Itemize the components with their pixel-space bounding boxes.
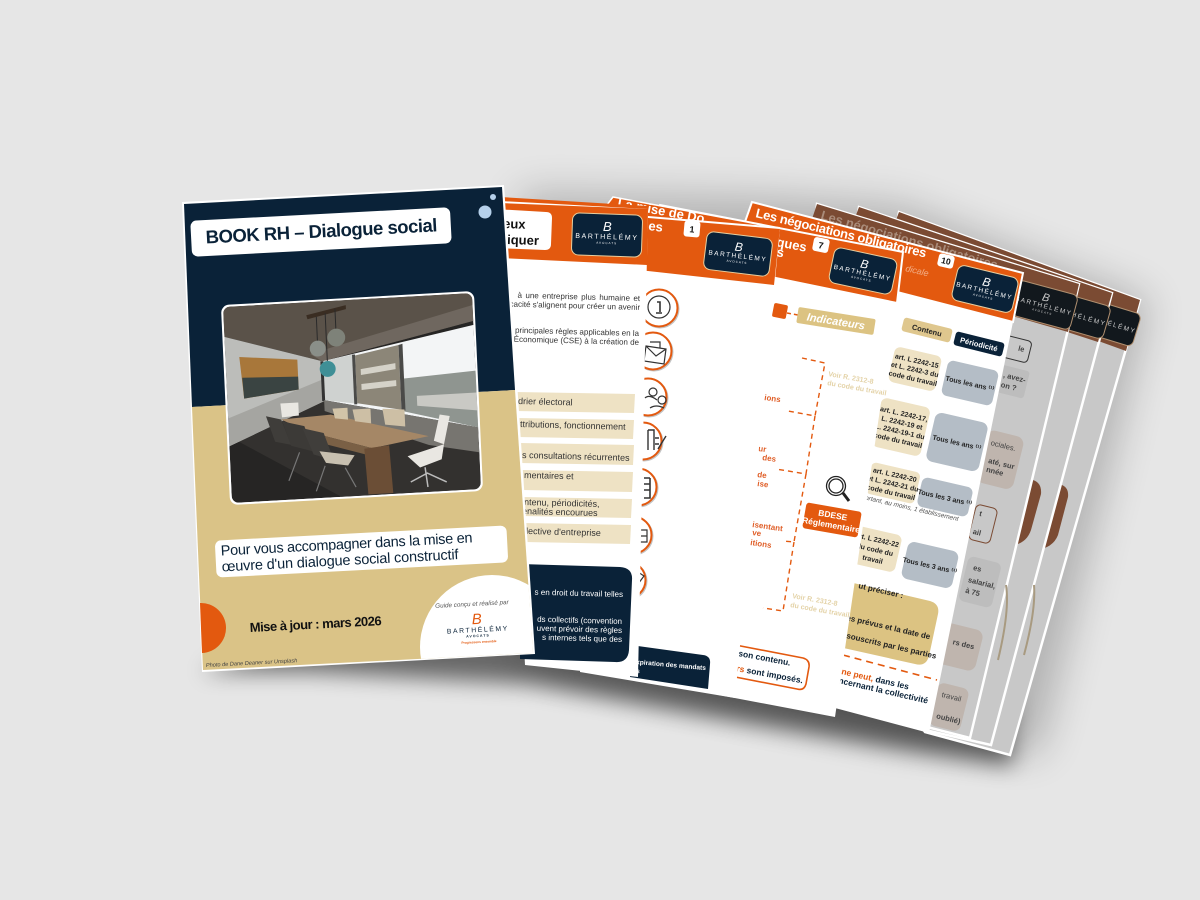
logo: AVOCATS (851, 275, 872, 283)
table rows: code du travail (866, 484, 916, 502)
muted boxes: oublié) (935, 711, 962, 726)
title: es (648, 218, 664, 235)
orange labels: ise (757, 479, 770, 490)
decorative dots (478, 194, 496, 218)
title (190, 207, 452, 257)
table rows: travail (862, 554, 883, 566)
logo: AVOCATS (596, 241, 617, 245)
logo (951, 264, 1019, 314)
closing note: ncernant la collectivité (838, 675, 929, 706)
table rows: du code du (856, 543, 894, 558)
icon glyphs (638, 296, 670, 584)
page 7: BDESE: s (775, 244, 785, 260)
photo credit: Photo de Dane Deaner sur Unsplash (206, 658, 297, 669)
logo: B (981, 274, 992, 290)
muted boxes: rs des (952, 637, 975, 651)
page 10: négociations obligatoires (700, 202, 1023, 733)
summary bars: ttributions, fonctionnement (520, 419, 626, 432)
intro paragraphs: Économique (CSE) à la création de (514, 335, 640, 347)
muted boxes (928, 335, 1032, 732)
table rows (847, 346, 999, 590)
navy note box: ds collectifs (convention (537, 615, 622, 626)
logo (1044, 290, 1112, 340)
muted boxes: le (1017, 344, 1025, 354)
orange labels (750, 393, 784, 550)
muted boxes: nnée (985, 465, 1004, 478)
orange half circle (200, 603, 226, 653)
intro paragraphs (509, 291, 641, 347)
table rows: Tous les ans ⁽¹⁾ (945, 374, 995, 394)
reference notes: du code du travail (827, 380, 887, 397)
orange labels: isentant (752, 520, 784, 533)
logo: BARTHÉLÉMY (575, 231, 639, 242)
BDESE label: BDESE (818, 508, 848, 523)
muted boxes: salarial, (967, 575, 996, 591)
navy note box (520, 564, 632, 662)
title: ques (775, 234, 808, 255)
title: BOOK RH – Dialogue social (205, 214, 438, 247)
logo: B (603, 219, 612, 234)
logo (571, 213, 643, 257)
logo: BARTHÉLÉMY (1048, 303, 1107, 328)
icon circles (608, 290, 680, 600)
orange labels: ve (752, 528, 762, 538)
brown side shape (1036, 482, 1068, 550)
table rows: L. 2242-19-1 du (874, 423, 925, 441)
update date: Mise à jour : mars 2026 (249, 613, 382, 635)
logo (828, 247, 898, 295)
muted boxes: , avez- (1002, 370, 1027, 385)
page number: 1 (689, 224, 695, 235)
dashed tree (763, 358, 825, 611)
summary bars: drier électoral (518, 396, 573, 407)
navy note box: uvent prévoir des règles (537, 624, 622, 635)
logo: AVOCATS (1032, 307, 1053, 316)
logo: B (734, 240, 744, 254)
logo (1074, 297, 1142, 347)
muted boxes: on ? (1000, 380, 1018, 393)
page stack: back page A (780, 204, 1079, 738)
logo: BARTHÉLÉMY (1078, 310, 1137, 335)
table rows: art. L 2242-15 (894, 353, 939, 370)
author badge: Progressons ensemble (461, 639, 497, 645)
logo: BARTHÉLÉMY (1014, 294, 1074, 317)
title: Les négociations obligatoires (754, 205, 928, 260)
page number (683, 220, 701, 238)
reference notes: du code du travail (790, 602, 850, 619)
gold callout: es prévus et la date de (846, 613, 932, 641)
callout: son contenu. (738, 648, 791, 668)
logo: BARTHÉLÉMY (833, 262, 892, 283)
dark footer bar: s (636, 668, 640, 675)
logo: B (1041, 291, 1051, 305)
dark footer bar: xpiration des mandats (636, 659, 706, 672)
muted boxes: até, sur (987, 456, 1016, 471)
table rows: Tous les 3 ans ⁽¹⁾ (902, 556, 958, 576)
page number: 10 (940, 255, 952, 267)
page 7: BDESE (640, 205, 903, 717)
intro paragraphs: s principales règles applicables en la (509, 326, 640, 338)
gold callout: souscrits par les parties (846, 631, 938, 661)
muted boxes: es (972, 563, 983, 574)
cover page (182, 185, 535, 672)
subtitle box: Pour vous accompagner dans la mise en (220, 530, 473, 559)
logo: B (859, 256, 870, 272)
table rows: art. L. 2242-17, (879, 406, 928, 424)
Indicateurs label (796, 307, 876, 335)
summary bars: enalités encourues (522, 506, 598, 518)
page stack: back page B (800, 207, 1112, 745)
logo: BARTHÉLÉMY (955, 279, 1014, 302)
orange labels: de (757, 470, 768, 480)
author badge: Guide conçu et réalisé par (435, 599, 510, 610)
closing note: ne peut, dans les (841, 666, 910, 692)
orange labels: ur (758, 444, 767, 454)
brown side shape (1008, 478, 1041, 546)
author badge (420, 575, 533, 659)
table rows: Tous les 3 ans ⁽¹⁾ (917, 488, 973, 508)
author badge: BARTHÉLÉMY (447, 623, 509, 636)
orange labels: ions (764, 393, 782, 404)
summary bars: s consultations récurrentes (522, 450, 630, 463)
logo: AVOCATS (973, 292, 994, 301)
table column headers: Contenu (911, 322, 943, 339)
back sliver of page 1 header with title: La mise de Do (616, 195, 706, 226)
table rows: et L. 2242-21 du (866, 475, 919, 494)
table rows: code du travail (888, 370, 938, 388)
reference notes: Voir R. 2312-8 (828, 371, 874, 386)
BDESE label: Réglementaire (801, 515, 861, 535)
muted boxes: ail (972, 527, 982, 538)
page stack: back page C (830, 212, 1142, 755)
table rows: L. 2242-19 et (881, 415, 924, 432)
drop shadow under stack (200, 192, 1150, 766)
title chip: eux (503, 216, 527, 232)
table rows: et L. 2242-3 du (890, 362, 939, 379)
meeting room photo (221, 291, 483, 505)
summary bars (515, 392, 635, 544)
subtitle: dicale (905, 263, 930, 278)
logo: AVOCATS (726, 259, 748, 265)
gold callout (830, 581, 938, 665)
faded title: Les négociations obligatoires (819, 207, 1000, 272)
orange connector node (772, 303, 798, 319)
subtitle box (215, 525, 508, 578)
callout (725, 643, 809, 689)
navy note box: s en droit du travail telles (534, 588, 623, 599)
table column headers: Périodicité (959, 335, 999, 353)
muted boxes: t (978, 509, 983, 518)
icon: magnifier (826, 476, 849, 501)
intro paragraphs: à une entreprise plus humaine et (517, 291, 641, 303)
BDESE label (801, 502, 863, 538)
callout: rs sont imposés. (736, 663, 804, 685)
reference notes (790, 371, 887, 619)
table column headers (901, 317, 1005, 357)
navy note box: s internes tels que des (542, 633, 622, 644)
cover navy band (184, 187, 515, 407)
logo (703, 231, 773, 277)
gold callout: ut préciser : (858, 581, 904, 600)
summary bars: lective d'entreprise (526, 526, 601, 538)
title chip: iquer (507, 232, 539, 248)
logo (1009, 280, 1079, 330)
table rows: art. L 2242-20 (872, 467, 917, 484)
subtitle box: œuvre d'un dialogue social constructif (221, 547, 460, 575)
cover tan band (192, 390, 533, 670)
Indicateurs label: Indicateurs (806, 311, 866, 333)
author badge: B (471, 611, 482, 628)
muted boxes: travail (941, 690, 963, 704)
reference notes: Voir R. 2312-8 (792, 593, 838, 608)
back sliver of page 1 header with title (600, 195, 780, 229)
title chip (495, 209, 552, 250)
table rows: Tous les ans ⁽¹⁾ (932, 433, 982, 453)
page number: 7 (817, 240, 824, 251)
page number (812, 237, 830, 253)
orange labels: des (762, 453, 777, 464)
page 1: icon list (580, 213, 780, 698)
page 2: enjeux (495, 197, 648, 677)
author badge: AVOCATS (466, 633, 490, 639)
summary bars: ntenu, périodicités, (524, 497, 600, 509)
summary bars: mentaires et (524, 470, 574, 481)
intro paragraphs: cacité s'alignent pour créer un avenir (509, 300, 641, 312)
logo: BARTHÉLÉMY (708, 247, 768, 264)
table rows: art. L 2242-22 (854, 532, 900, 549)
page number (937, 253, 955, 269)
table footnote: portant, au moins, 1 établissement (860, 494, 960, 523)
orange labels: itions (750, 538, 773, 550)
muted boxes: ociales. (990, 438, 1017, 453)
muted boxes: à 75 (964, 586, 981, 598)
table rows: code du travail (873, 432, 923, 450)
dark footer bar (630, 645, 710, 689)
